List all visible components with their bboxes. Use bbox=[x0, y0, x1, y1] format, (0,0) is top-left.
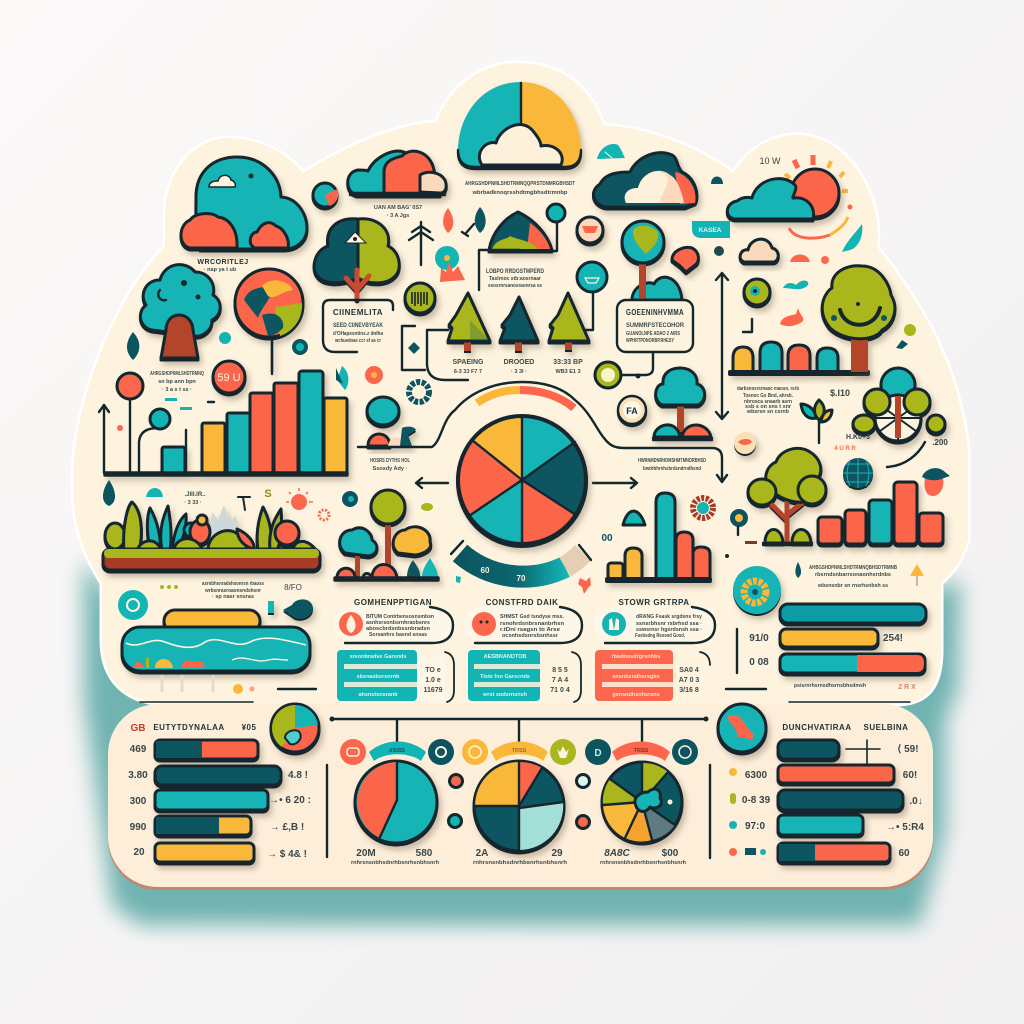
pie gauge bbox=[451, 541, 591, 583]
bar chart right bbox=[818, 482, 943, 544]
garden top icons: S bbox=[264, 488, 272, 500]
flow text right: bwdrbhrnhsbrdsndrndhsnd bbox=[643, 466, 701, 472]
big cloud caption: WRCORITLEJ bbox=[197, 259, 249, 266]
bar chart left bbox=[105, 371, 347, 473]
info box middle: Taslrnoc stb:aosrnaar bbox=[489, 276, 542, 282]
info box left: d'OHapesntins.z dnlha bbox=[333, 331, 384, 337]
info box middle: ssosrnrsanosraonrsa ss bbox=[488, 283, 542, 289]
pie two labels: 2A bbox=[476, 848, 488, 859]
small pie badge bbox=[271, 704, 319, 752]
small dot bbox=[714, 246, 724, 256]
right bar labels: 2 R X bbox=[898, 684, 916, 691]
lower right labels: →• 5:R4 bbox=[886, 822, 924, 833]
lower right labels: 60! bbox=[903, 770, 917, 781]
pine icon bbox=[409, 222, 433, 265]
card three: Fosbsdng Reosnd Gosd. bbox=[635, 633, 685, 639]
wheel tree values bbox=[834, 434, 948, 467]
table one: ahsnstsnsranb bbox=[358, 692, 398, 698]
sun gauge bbox=[789, 217, 862, 252]
coral mushroom bbox=[672, 248, 698, 272]
top right caption: AHBGSHDPNMLSHDTRMNQBHSDTRMNB bbox=[809, 565, 897, 571]
teal coral plant bbox=[435, 246, 465, 282]
orange circle bbox=[734, 432, 756, 454]
pin to tree bbox=[577, 262, 607, 330]
dome bars bbox=[730, 342, 868, 372]
horizontal connector bbox=[330, 716, 708, 747]
pie one labels: 20M bbox=[356, 848, 376, 859]
olive tree large bbox=[822, 266, 895, 372]
chart caption: sn bp ann bpn bbox=[158, 379, 196, 385]
top dome caption: AHRGSHDPNMLSHDTRMNQQPRSTDNMRGBHSDT bbox=[465, 181, 576, 187]
main pie chart bbox=[458, 416, 587, 544]
olive sprig bbox=[896, 324, 916, 349]
wheel tree bbox=[853, 368, 945, 441]
text block right: nbrosca snaarb asrn bbox=[744, 399, 793, 405]
table one: sbsnasbsrsnrnb bbox=[357, 674, 400, 680]
pie three labels: rnhrsnsnbhsdnrhbsnrhsnbhsnrh bbox=[600, 860, 687, 866]
value badge bbox=[213, 361, 245, 393]
lower left labels: 469 bbox=[130, 744, 147, 755]
small icons centre: 00 bbox=[601, 533, 613, 544]
board shadow bbox=[84, 560, 960, 925]
pie two labels bbox=[473, 848, 568, 866]
lower left header: GB bbox=[130, 723, 146, 734]
sun and cloud bbox=[727, 169, 839, 219]
pie two header bbox=[462, 739, 576, 765]
lower left header: EUTYTDYNALAA bbox=[153, 723, 225, 732]
table three: snsnbsndhsrsgbs bbox=[612, 674, 660, 680]
pie two labels: rnhrsnsnbhsdnrhbsnrhsnbhsnrh bbox=[473, 860, 568, 866]
card two bbox=[463, 598, 583, 643]
big cloud caption bbox=[197, 259, 249, 273]
table one: 11679 bbox=[423, 687, 443, 694]
top dome caption bbox=[465, 181, 576, 196]
separator dots bbox=[448, 774, 590, 828]
coral cloud caption: · 3 A Jgs bbox=[387, 213, 409, 219]
right arrow bbox=[593, 478, 637, 488]
small icons cluster bbox=[336, 366, 429, 402]
mountain icon bbox=[489, 212, 552, 250]
pie one bbox=[355, 761, 437, 843]
right bar labels: 254! bbox=[883, 633, 903, 644]
lower left labels: 300 bbox=[130, 796, 147, 807]
sun value: 10 W bbox=[759, 156, 781, 166]
barcode badge bbox=[405, 283, 435, 313]
lower left labels: 4.8 ! bbox=[288, 770, 308, 781]
text block right: darbsnosrsrnaoc maosn. rsrb bbox=[737, 386, 800, 392]
pine labels: SPAEING bbox=[452, 359, 484, 366]
lower left labels: → £,B ! bbox=[270, 822, 304, 833]
water panel header: asrnbhsnradshsonrsn rbaoss bbox=[202, 581, 264, 587]
table two: 71 0 4 bbox=[550, 687, 570, 694]
table two: AESBNANDTOB bbox=[484, 654, 526, 660]
leaf icons bbox=[443, 207, 486, 236]
teal label tag bbox=[692, 221, 730, 238]
flow text right bbox=[638, 458, 706, 472]
card three: dRANG Fsask srgdsns frsy bbox=[636, 614, 703, 620]
small coral items bbox=[743, 254, 829, 332]
gear badge bbox=[733, 566, 781, 614]
flow caption: HOSRS DYTHS HOL bbox=[370, 458, 410, 464]
flow arc around pie bbox=[358, 382, 727, 482]
right bar labels: 0 08 bbox=[749, 657, 769, 668]
lower right labels: .0↓ bbox=[909, 796, 923, 807]
water panel header: wrbsnrasroaonsndshsnr bbox=[204, 588, 262, 594]
chart caption: · 3 a s t ss · bbox=[162, 387, 192, 393]
small ball icon bbox=[313, 183, 338, 207]
dark cloud bbox=[593, 153, 697, 207]
sun rays bbox=[785, 155, 852, 210]
card three: sswsrnsr hgsrdsnsh ssa · bbox=[636, 627, 702, 633]
info box left: wchuedoas ccr sf as cr bbox=[334, 338, 382, 344]
water footer marks bbox=[140, 675, 316, 702]
table two bbox=[468, 650, 581, 702]
olive tree lower bbox=[748, 448, 826, 543]
water panel header: · sp nasr snsras bbox=[212, 594, 254, 600]
pine labels: DROOED bbox=[504, 359, 534, 366]
connector lines bbox=[402, 326, 468, 380]
table three: A7 0 3 bbox=[679, 677, 699, 684]
lower right labels: 97:0 bbox=[745, 821, 765, 832]
info box right: GOEENINHVMMA bbox=[626, 308, 684, 317]
big teal cloud bbox=[181, 157, 307, 249]
table two: 7 A 4 bbox=[552, 677, 568, 684]
right bar labels bbox=[726, 629, 916, 702]
table one bbox=[337, 650, 454, 702]
pie three header: D bbox=[594, 748, 602, 759]
text block right bbox=[737, 386, 800, 415]
garden illustration bbox=[103, 502, 320, 570]
info box middle: LOBPO RRDGSTMPERD bbox=[486, 269, 545, 275]
lower right labels bbox=[729, 740, 924, 859]
mound cluster bbox=[368, 427, 416, 446]
pine labels: 6-3 33 F7 7 bbox=[454, 369, 482, 375]
wheel tree values: .200 bbox=[932, 438, 948, 447]
info box right bbox=[617, 300, 693, 352]
lower right labels: 6300 bbox=[745, 770, 768, 781]
lower right labels: 60 bbox=[898, 848, 910, 859]
bars right upper bbox=[780, 604, 926, 673]
bird icon bbox=[922, 468, 950, 496]
info box left: SEED CIINEVBYEAK bbox=[333, 322, 383, 329]
lower right bars bbox=[778, 740, 903, 862]
pie three labels: $00 bbox=[662, 848, 679, 859]
lower left labels: 990 bbox=[130, 822, 147, 833]
pie three labels: 8A8C bbox=[604, 848, 631, 859]
flow caption: Ssosdy Ady · bbox=[373, 466, 407, 472]
table three bbox=[595, 650, 710, 701]
separator line bbox=[709, 765, 711, 858]
lower left labels bbox=[128, 744, 327, 860]
table three: rbsdnosdrgrsnhbs bbox=[612, 654, 660, 660]
info box middle bbox=[479, 250, 545, 290]
lower right labels: 0-8 39 bbox=[742, 795, 771, 806]
chart caption: AHRGSHDPNMLSHDTRMNQ bbox=[150, 371, 205, 377]
wheel tree values: 4 U R R bbox=[834, 446, 856, 452]
olive seed bbox=[421, 503, 433, 511]
lower left header bbox=[130, 723, 256, 734]
coral splat bbox=[456, 576, 591, 594]
lower right header bbox=[782, 723, 908, 732]
water bird bbox=[268, 599, 313, 619]
sprout icon bbox=[801, 400, 832, 443]
value badge: 59 U bbox=[217, 372, 241, 384]
pie one labels: rnhrsnsnbhsdnrhbsnrhsnbhsnrh bbox=[351, 860, 440, 866]
coral cloud caption: UAN AM BAG' 0S7 bbox=[374, 205, 422, 211]
card two: CONSTFRD DAIK bbox=[486, 598, 558, 607]
garden top icons bbox=[103, 480, 358, 520]
pie three bbox=[602, 762, 682, 842]
card one: asnhsrsonbsrnhraobsnrs bbox=[366, 620, 430, 626]
chart axis and lollipops bbox=[99, 373, 214, 473]
map badge bbox=[718, 704, 766, 752]
card two: SHMST Gsd tsndyse mss. bbox=[500, 614, 564, 620]
card one bbox=[333, 598, 453, 643]
right bar labels: psisrnrhsrnsdhsrnsbhsdmsh bbox=[794, 683, 867, 689]
pine labels: WB3 E1 3 bbox=[555, 369, 581, 375]
pie one labels: 580 bbox=[416, 848, 433, 859]
table three: 3/16 8 bbox=[679, 687, 699, 694]
lower left labels: → $ 4& ! bbox=[267, 849, 307, 860]
water panel header: 8/FO bbox=[284, 583, 302, 592]
eye badge bbox=[744, 279, 770, 305]
pie one header bbox=[340, 739, 454, 765]
table three: gsnsndhsnhsrsns bbox=[612, 692, 660, 698]
garden top icons: .JIII.IR.. bbox=[184, 492, 206, 498]
pie gauge: 60 bbox=[481, 566, 490, 575]
lower right labels: ⟨ 59! bbox=[897, 744, 919, 755]
info box right: WPHRTPDNORBP.RHESY bbox=[626, 338, 674, 344]
face badge: FA bbox=[626, 406, 638, 416]
pie two header: TRSS bbox=[512, 748, 527, 754]
pie three header: TRSS bbox=[634, 748, 649, 754]
coral teal cloud bbox=[348, 151, 446, 195]
table three: SA0 4 bbox=[679, 667, 699, 674]
pie two labels: 29 bbox=[551, 848, 563, 859]
tree group bbox=[335, 490, 438, 578]
card one: BITUM Contrbensosnsmbsn bbox=[366, 614, 435, 620]
info box right: GUANOLNPE ADAO 2 AIRS bbox=[626, 331, 680, 337]
table two: 8 5 5 bbox=[552, 667, 568, 674]
peach cloud bbox=[740, 239, 778, 262]
grid globe bbox=[843, 458, 873, 488]
teal hat icon bbox=[597, 144, 625, 159]
card one: Sorsanhrs basnd snsas bbox=[369, 632, 427, 638]
small leaf badges bbox=[127, 332, 308, 360]
small teal dome bbox=[711, 176, 723, 184]
bar chart centre bbox=[607, 493, 710, 579]
top dome chart bbox=[458, 82, 581, 167]
card one: GOMHENPPTIGAN bbox=[354, 598, 432, 607]
table two: wrst sodsrnsnsh bbox=[482, 692, 528, 698]
teal oval bbox=[367, 397, 399, 425]
chart caption bbox=[150, 371, 205, 393]
top dome caption: wbrbadknoqrsshdtmgbhsdtrmnbp bbox=[471, 190, 568, 196]
top right caption bbox=[795, 562, 924, 589]
vertical double arrow bbox=[716, 273, 728, 419]
pie one header: dSISS bbox=[389, 748, 405, 754]
pine labels: 33:33 BP bbox=[553, 359, 583, 366]
lower right header: SUELBINA bbox=[864, 723, 908, 732]
small icons centre bbox=[601, 498, 757, 558]
table two: Tiste fon Garscnds bbox=[480, 674, 530, 680]
big cloud caption: · nap ya t ub bbox=[204, 267, 237, 273]
mountain pin bbox=[538, 204, 565, 251]
pine labels bbox=[452, 359, 583, 375]
half tree bbox=[314, 219, 399, 299]
card two: rsnohrdsnbrsnanbrhsn bbox=[500, 621, 565, 627]
pine labels: · 3 3I · bbox=[511, 369, 527, 375]
pie three header bbox=[585, 739, 698, 765]
pie one labels bbox=[351, 848, 440, 866]
pine tree three bbox=[549, 293, 589, 350]
card one: aboscbrdsnbssnbradsn bbox=[366, 626, 431, 632]
table one: TO e bbox=[425, 667, 441, 674]
ring connector bbox=[595, 352, 653, 388]
card three: STOWR GRTRPA bbox=[618, 598, 690, 607]
wheel tree values: H.K0+3 bbox=[846, 434, 870, 441]
card two: ocsnhsdsnrsbsnhssr bbox=[502, 633, 559, 639]
pie two bbox=[474, 761, 564, 851]
top right caption: rbsrndsnbarrsonaonhsrdnbs bbox=[815, 572, 891, 578]
info box left: CIINEMLITA bbox=[333, 308, 383, 317]
small teal tree bbox=[653, 368, 712, 438]
card two: r.tDni rsagsn to Arse bbox=[500, 627, 560, 633]
dish badge bbox=[577, 217, 603, 243]
text block right: ssb s on sns t snr bbox=[745, 404, 792, 410]
infographic board bbox=[73, 63, 968, 890]
value 110: $.I10 bbox=[830, 388, 850, 398]
table one: 1.0 e bbox=[425, 677, 441, 684]
right bar labels: 91/0 bbox=[749, 633, 769, 644]
face badge bbox=[618, 396, 646, 424]
lower left labels: →• 6 20 : bbox=[269, 795, 311, 806]
info box left bbox=[323, 300, 393, 352]
pie gauge: 70 bbox=[517, 574, 526, 583]
card three: ssnsrbhsnr rsbrhsd ssa · bbox=[636, 621, 702, 627]
garden top icons: · 3 33 · bbox=[184, 500, 202, 506]
lower left labels: 20 bbox=[133, 847, 145, 858]
flow text right: HWRNMDNRHDMSHMTMNDRBHSD bbox=[638, 458, 706, 464]
lobed teal tree bbox=[140, 265, 220, 358]
water pills bbox=[122, 610, 310, 671]
water panel header bbox=[118, 581, 302, 620]
text block right: Tosnoc Gs Bnd, ahrsb. bbox=[743, 393, 793, 399]
flow caption bbox=[370, 458, 410, 472]
pine tree two bbox=[500, 297, 538, 351]
globe tree bbox=[622, 221, 682, 300]
lower left bars bbox=[155, 740, 281, 862]
lower right header: DUNCHVATIRAA bbox=[782, 723, 852, 732]
pine tree one bbox=[448, 293, 490, 351]
globe bbox=[235, 269, 303, 372]
info box right: SUMMRFSTECOHOR bbox=[626, 322, 684, 329]
teal label tag: KASEA bbox=[699, 227, 722, 234]
lower left labels: 3.80 bbox=[128, 770, 148, 781]
left arrow bbox=[416, 478, 448, 488]
text block right: wbsrsn sn csrnb bbox=[746, 409, 790, 415]
top right caption: wbsnsnbr sn rnsrhsnbsh ss bbox=[817, 583, 888, 589]
card three bbox=[593, 598, 715, 643]
coral cloud caption bbox=[374, 205, 422, 219]
table one: sreonbradve Garsnds bbox=[350, 654, 406, 660]
pie three labels bbox=[600, 848, 687, 866]
lower left header: ¥05 bbox=[242, 723, 256, 732]
